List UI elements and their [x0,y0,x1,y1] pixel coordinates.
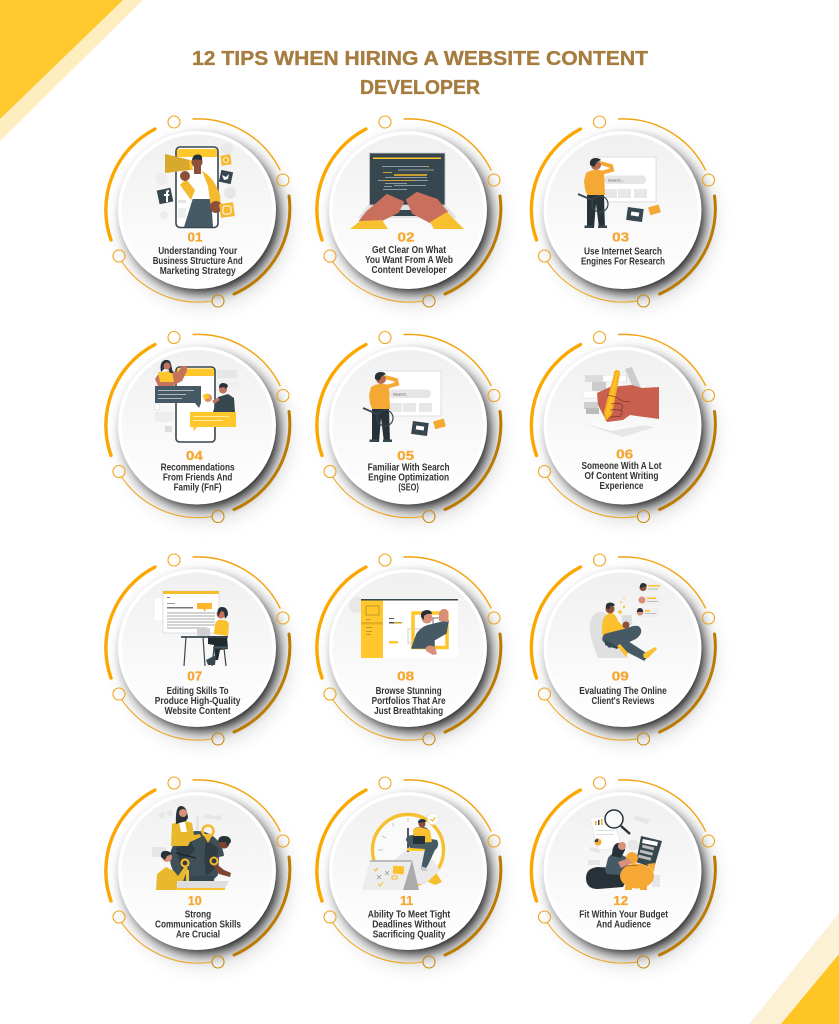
description: Of Content Writing [584,471,658,482]
illustration: woman saving in a piggy bank [586,810,662,890]
description [155,910,241,940]
description: Someone With A Lot [582,461,662,472]
card 11 [317,777,501,968]
illustration: woman editing at a desk [155,591,232,666]
card 03 [531,116,715,307]
description: Understanding Your [158,246,237,257]
description: And Audience [596,920,651,930]
number: 02 [398,230,415,244]
description [579,686,667,707]
description: Client's Reviews [592,696,655,707]
description [155,686,241,717]
description: Just Breathtaking [374,706,443,717]
illustration: man searching for SEO: Search... [393,391,409,396]
description: Website Content [165,706,231,717]
number: 10 [188,894,202,908]
ring and disc [317,777,501,968]
description: Produce High-Quality [155,696,241,707]
description: You Want From A Web [365,255,453,266]
description [372,686,446,717]
number: 05 [397,449,414,463]
ring and disc [531,116,715,307]
title [192,48,648,99]
ring and disc [317,554,501,745]
number: 01 [188,230,203,244]
number: 04 [186,449,203,463]
description: Fit Within Your Budget [579,910,668,920]
description [368,910,451,940]
description: Portfolios That Are [372,696,446,707]
ring and disc [106,116,290,307]
illustration: portfolio web page with man [349,597,458,658]
description: Communication Skills [155,920,241,930]
illustration: man with megaphone on phone [156,143,236,228]
card 02 [317,116,501,307]
title: DEVELOPER [360,77,481,99]
description: Sacrificing Quality [373,930,446,940]
card 04 [106,332,290,522]
ring and disc [106,554,290,745]
description: Get Clear On What [372,245,446,256]
number: 11 [400,894,413,908]
illustration: man searching the web: Search... [608,177,624,182]
description: Marketing Strategy [160,266,236,277]
description: Browse Stunning [376,686,442,697]
ring and disc [106,332,290,522]
top-left corner decoration [0,0,143,141]
card 05 [317,332,501,522]
description: Are Crucial [176,930,220,940]
number: 07 [187,670,202,684]
description: Ability To Meet Tight [368,910,451,920]
illustration: man reading client reviews [590,583,662,660]
card 06 [531,332,715,522]
ring and disc [531,777,715,968]
description: Use Internet Search [584,247,662,258]
illustration: hands typing on laptop [350,153,464,229]
number: 06 [616,448,633,462]
description [579,910,668,930]
ring and disc [106,777,290,968]
description [153,246,243,277]
description: Business Structure And [153,256,243,267]
bottom-right corner decoration [749,913,839,1024]
description: Recommendations [161,462,235,474]
description: Deadlines Without [372,920,446,930]
description: Experience [600,481,644,492]
description: Content Developer [372,265,447,276]
description: Editing Skills To [167,686,229,697]
ring and disc [317,116,501,307]
illustration: fist holding a pen [582,367,659,437]
number: 08 [397,670,414,684]
card 07 [106,554,290,745]
description [368,462,450,494]
description: Engine Optimization [368,472,449,484]
number: 03 [612,230,629,244]
illustration: man searching the web [578,157,661,228]
description: Engines For Research [581,257,665,268]
description [161,462,235,494]
card 09 [531,554,715,745]
title: 12 TIPS WHEN HIRING A WEBSITE CONTENT [192,48,648,70]
description: From Friends And [163,472,232,484]
card 01 [106,116,290,307]
illustration: people around a globe [152,806,232,890]
description: Familiar With Search [368,462,450,474]
illustration: friends chatting around a phone [154,360,239,442]
description: Strong [185,910,211,920]
illustration: clock and calendar with man on laptop [362,814,444,890]
description [365,245,453,276]
description: Evaluating The Online [579,686,667,697]
number: 09 [612,670,629,684]
illustration: man searching for SEO [363,371,446,442]
description [582,461,662,492]
description: (SEO) [398,482,419,494]
card 08 [317,554,501,745]
ring and disc [531,332,715,522]
card 10 [106,777,290,968]
description [581,247,665,268]
ring and disc [531,554,715,745]
card 12 [531,777,715,968]
description: Family (FnF) [174,482,222,494]
ring and disc [317,332,501,522]
number: 12 [613,894,628,908]
